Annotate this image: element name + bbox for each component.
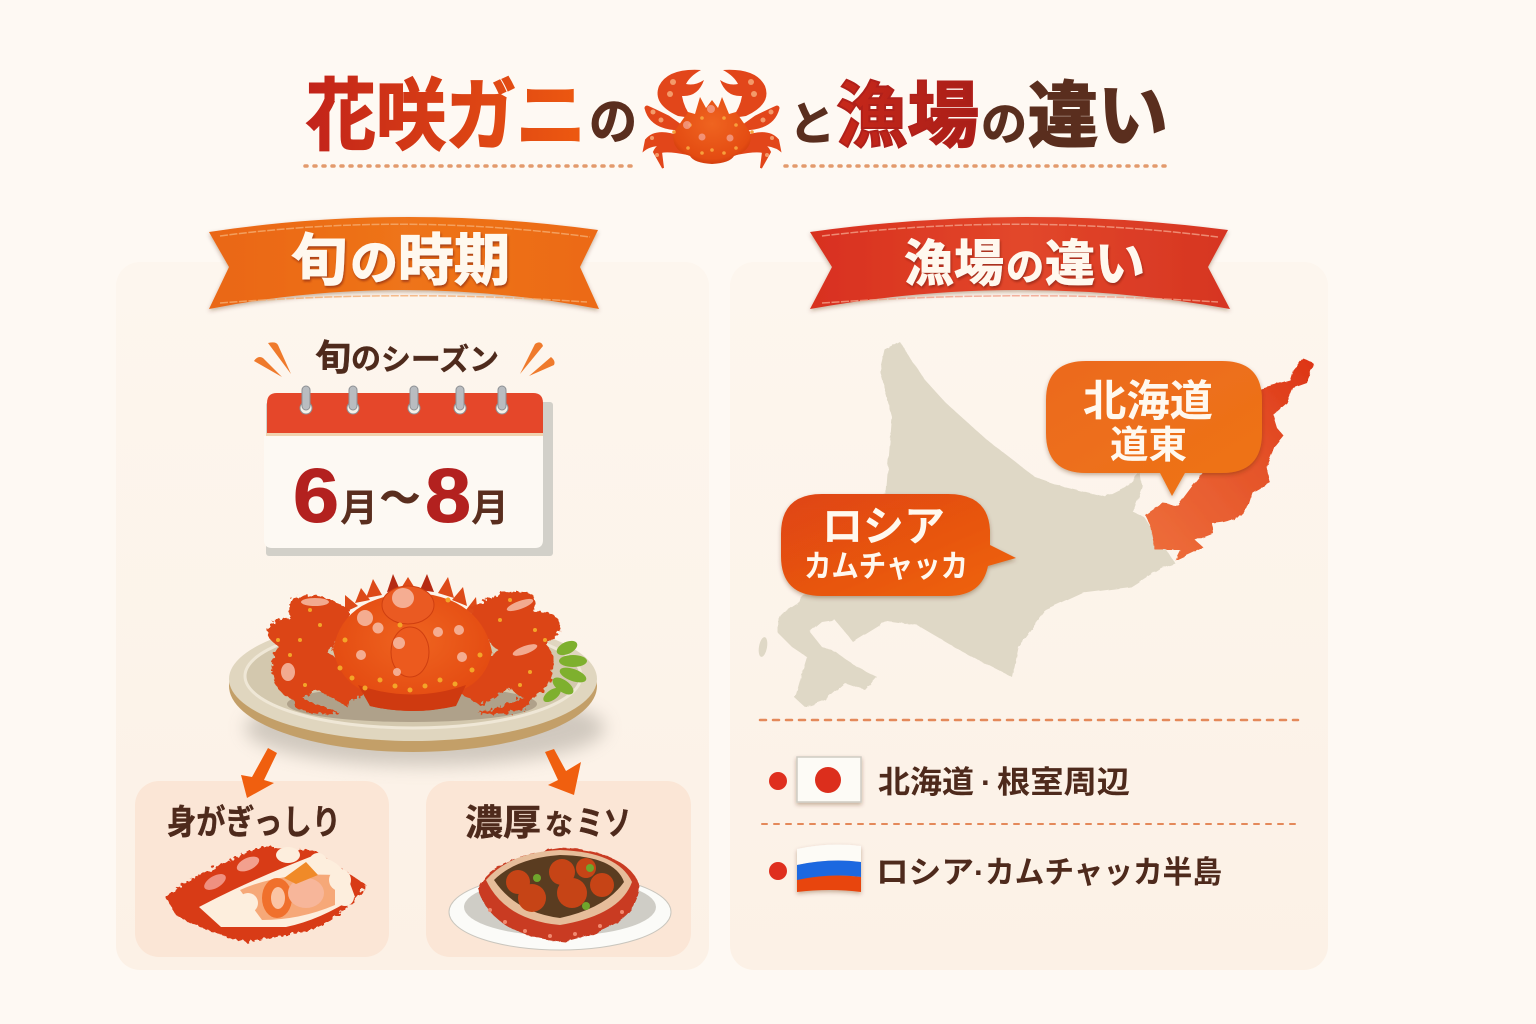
title text: 漁場: 漁場 [836,77,979,157]
icon: title crab [644,70,780,168]
title text: 違い: 違い [1028,77,1168,157]
arrow: to miso [545,749,581,795]
map: Hokkaido [757,342,1313,707]
callout text: 道東 [1110,425,1187,467]
card: miso [426,781,691,957]
callout text: ロシア [822,503,945,550]
panel: season [116,217,709,970]
banner heading: の [350,237,398,290]
card heading: ミソ [576,805,631,843]
arrow: to meat [241,748,277,798]
banner: season [209,217,599,309]
crab highlights [281,588,539,681]
legend text: · [981,765,991,800]
card: meat [135,781,389,957]
calendar rings [300,386,508,414]
legend text: 北海道 [878,765,974,800]
bullet [769,862,787,880]
legend row: Russia [769,845,1222,892]
icon: right sparks [520,342,555,376]
calendar [264,386,553,556]
crab body [333,593,492,711]
callout text: 北海道 [1083,378,1213,426]
calendar date text [293,454,509,539]
season heading: の [351,343,381,376]
legend text: 根室周辺 [997,765,1130,800]
title text: と: と [789,98,835,150]
icon: Russia flag [797,845,861,892]
map land [778,342,1175,707]
season heading: シーズン [381,343,499,377]
card heading: 濃厚 [465,802,541,843]
banner heading: 漁場 [904,236,1004,292]
callout: Russia Kamchatka [781,494,1016,596]
legend text: カムチャッカ半島 [985,855,1222,890]
calendar date text: 6 [293,454,339,539]
callout text: カムチャッカ [804,549,968,584]
legend row: Japan [769,757,1130,802]
icon: Japan flag [797,757,861,802]
garnish leaves [541,638,588,705]
icon: left sparks [254,342,291,377]
illustration: crab on plate [229,574,605,766]
title text: の: の [589,94,637,150]
legend text: · [974,855,984,890]
title text: 花咲ガニ: 花咲ガニ [306,72,586,160]
calendar date text: 月 [340,488,378,530]
bullet [769,772,787,790]
calendar date text: 〜 [380,466,420,524]
title dotted underline [305,164,1166,168]
card heading: 身がぎっしり [167,803,341,842]
banner heading: 違い [1045,236,1145,292]
crab legs [264,591,565,714]
callout: Hokkaido Doto [1046,361,1262,496]
crab spines [345,574,478,618]
illustration: crab miso [449,848,671,950]
calendar date text: 月 [471,488,509,530]
calendar date text: 8 [425,454,471,539]
season heading: 旬 [315,337,351,378]
illustration: crab meat [166,847,366,942]
map highlighted region: Doto [1145,358,1313,560]
title [306,72,1168,160]
banner heading: 時期 [398,229,510,292]
banner: fishing grounds [810,217,1230,309]
banner heading: の [1006,247,1044,289]
title text: の: の [981,98,1027,150]
banner heading: 旬 [291,229,347,292]
legend text: ロシア [876,855,974,890]
panel: fishing grounds [730,217,1328,970]
card heading: な [545,809,573,840]
